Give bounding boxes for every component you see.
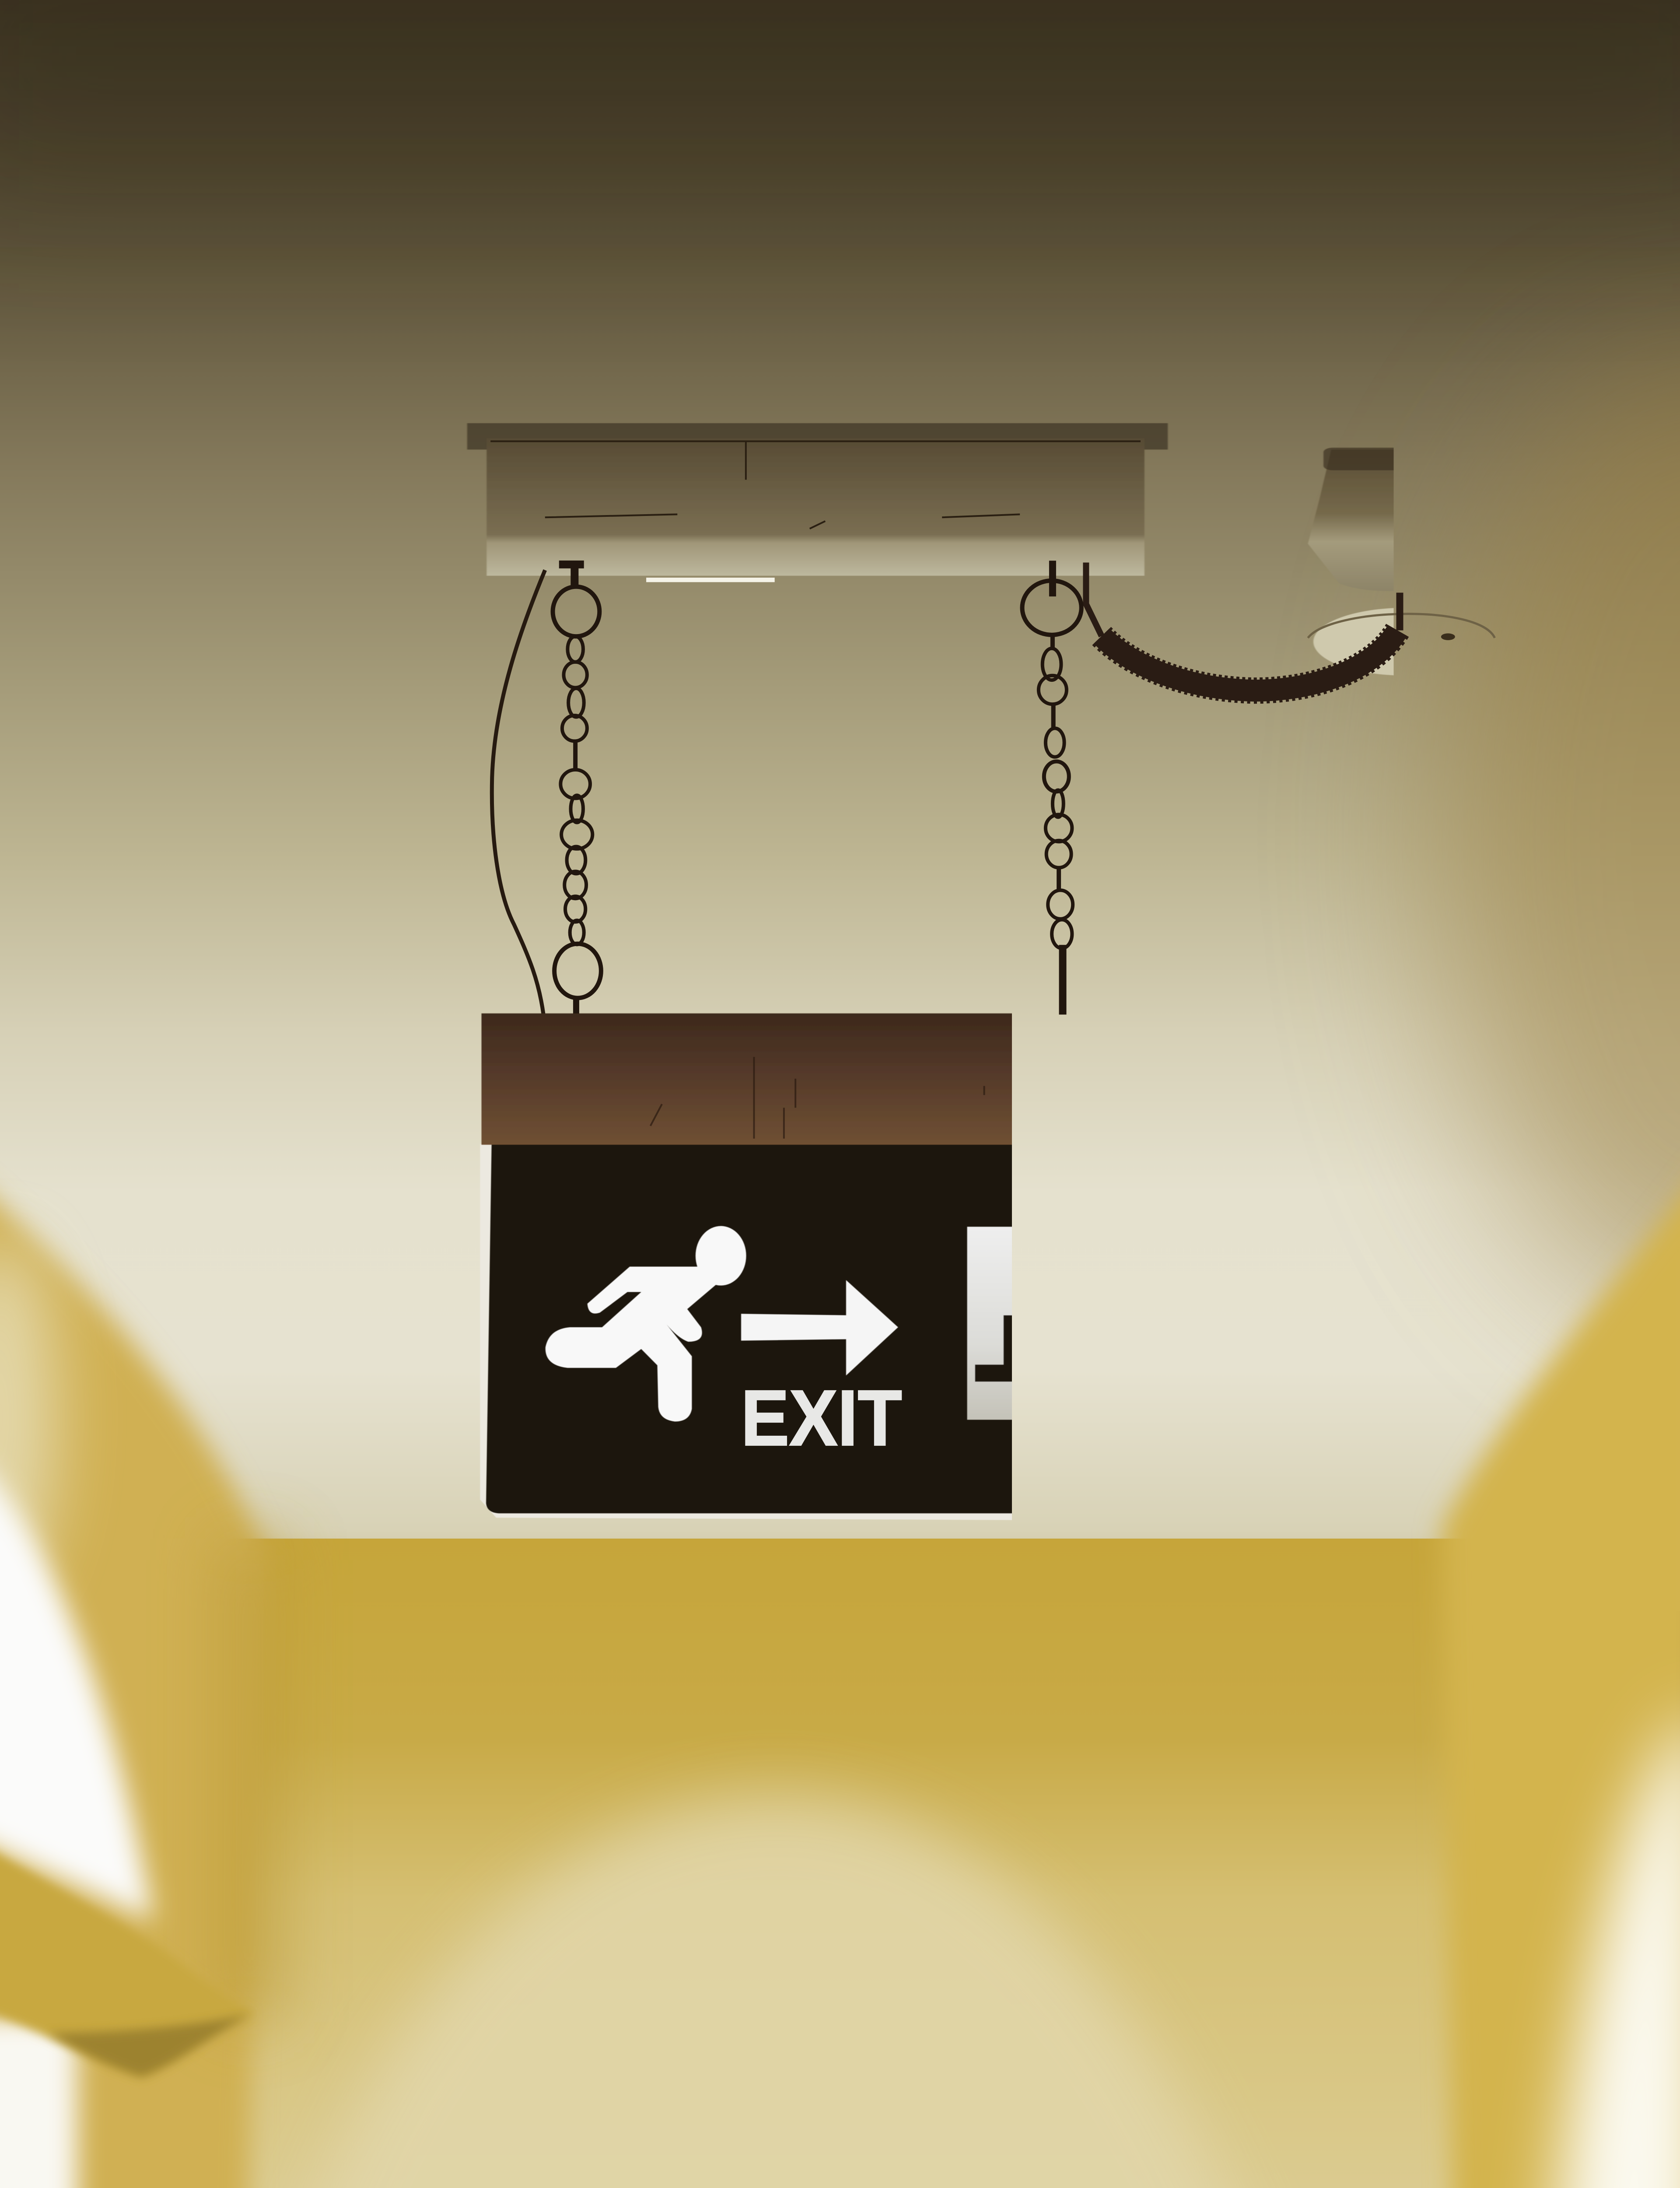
ceiling warm shading on the right: [1434, 354, 1680, 1321]
left wall: [0, 1176, 266, 2188]
right chain: [1022, 561, 1082, 1014]
sill shadow: [48, 2014, 251, 2077]
right wall: [1442, 1163, 1680, 2188]
back wall corner shading: [217, 1539, 282, 2022]
sign black panel: [486, 1143, 1152, 1513]
plate rim: [1308, 614, 1495, 638]
back wall: [161, 1539, 1514, 2188]
left wall pale edge: [0, 1241, 56, 1595]
right window light: [1530, 1708, 1680, 2188]
ceiling mount assembly: [467, 423, 1168, 582]
ceiling top vignette: [0, 0, 1680, 193]
left wire: [492, 570, 545, 1014]
mount box: [486, 438, 1144, 576]
junction dark top: [1323, 448, 1452, 470]
junction and conduit: [1086, 448, 1680, 691]
left window upper: [0, 1450, 153, 1920]
junction collar: [1448, 461, 1504, 525]
chain links: [1022, 581, 1082, 1014]
chain links: [553, 587, 601, 1014]
figure head: [696, 1226, 746, 1286]
plate screw: [1441, 633, 1455, 640]
light glint: [646, 578, 775, 582]
ceiling plate: [1313, 608, 1497, 676]
chain hook: [559, 565, 584, 585]
running figure: [546, 1226, 746, 1422]
chain hook: [1049, 561, 1056, 596]
stairs panel: [967, 1227, 1078, 1420]
left window lower: [0, 2017, 77, 2188]
junction body: [1308, 449, 1483, 591]
figure body: [546, 1267, 717, 1422]
top bar marks: [651, 1057, 984, 1139]
mount box marks: [490, 441, 1141, 529]
mount box shadow: [467, 423, 1168, 449]
sign lower white edge: [480, 1144, 1155, 1521]
exit label: EXIT: [741, 1374, 902, 1462]
sign top bar: [482, 1013, 1157, 1145]
conduit: [1086, 563, 1400, 691]
left window sill: [0, 1846, 255, 2078]
stairs symbol: [975, 1265, 1071, 1382]
pipe to the right: [1495, 476, 1680, 533]
exit sign: [480, 1013, 1157, 1521]
back wall light patch: [242, 1796, 1337, 2188]
ceiling: [0, 0, 1680, 1611]
arrow: [741, 1280, 898, 1375]
left chain: [553, 565, 601, 1014]
